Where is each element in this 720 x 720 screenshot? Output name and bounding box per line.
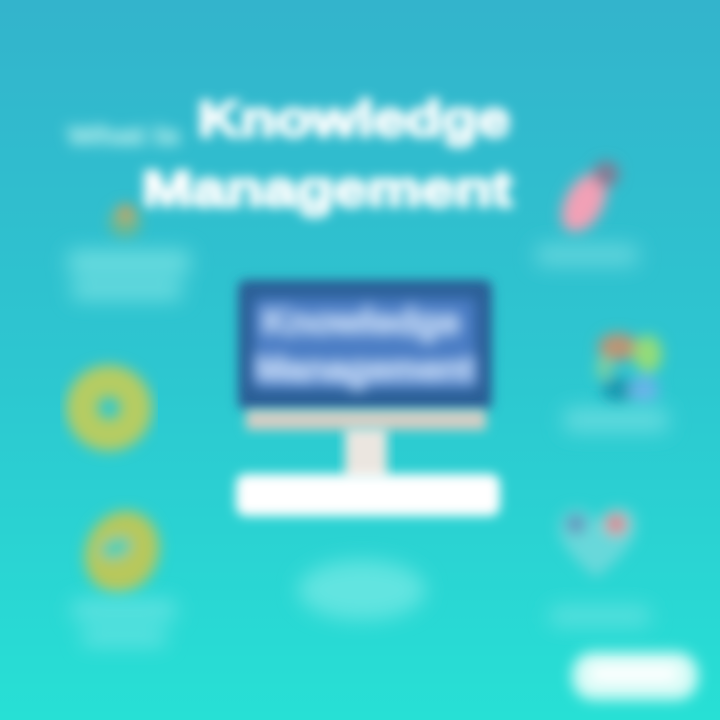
- monitor neck: [345, 428, 387, 482]
- icon: donut large: [82, 381, 136, 435]
- label: bottom left: [72, 600, 176, 646]
- monitor: [236, 280, 500, 516]
- monitor screen text: Knowledge: [262, 301, 460, 342]
- bottom centre blob: [298, 560, 426, 620]
- label: top right: [536, 244, 638, 266]
- icon: heart right: [559, 508, 636, 578]
- icon: pink top right: [552, 161, 619, 240]
- monitor screen panel: [254, 298, 476, 388]
- button: bottom right: [572, 652, 698, 700]
- monitor bezel: [246, 410, 486, 430]
- icon: donut small: [72, 499, 172, 605]
- icon: top left small: [109, 204, 141, 238]
- small title prefix: What is: [68, 123, 180, 150]
- monitor base: [236, 474, 500, 516]
- monitor screen text: Management: [256, 348, 474, 389]
- title: [142, 91, 512, 217]
- icon: rainbow right: [596, 333, 662, 405]
- monitor screen frame: [238, 280, 492, 410]
- title: Knowledge: [198, 91, 510, 147]
- monitor screen text: [256, 301, 474, 389]
- label: top left: [68, 250, 190, 300]
- label: lower right: [550, 606, 650, 626]
- label: right: [564, 408, 668, 432]
- title: Management: [142, 161, 512, 217]
